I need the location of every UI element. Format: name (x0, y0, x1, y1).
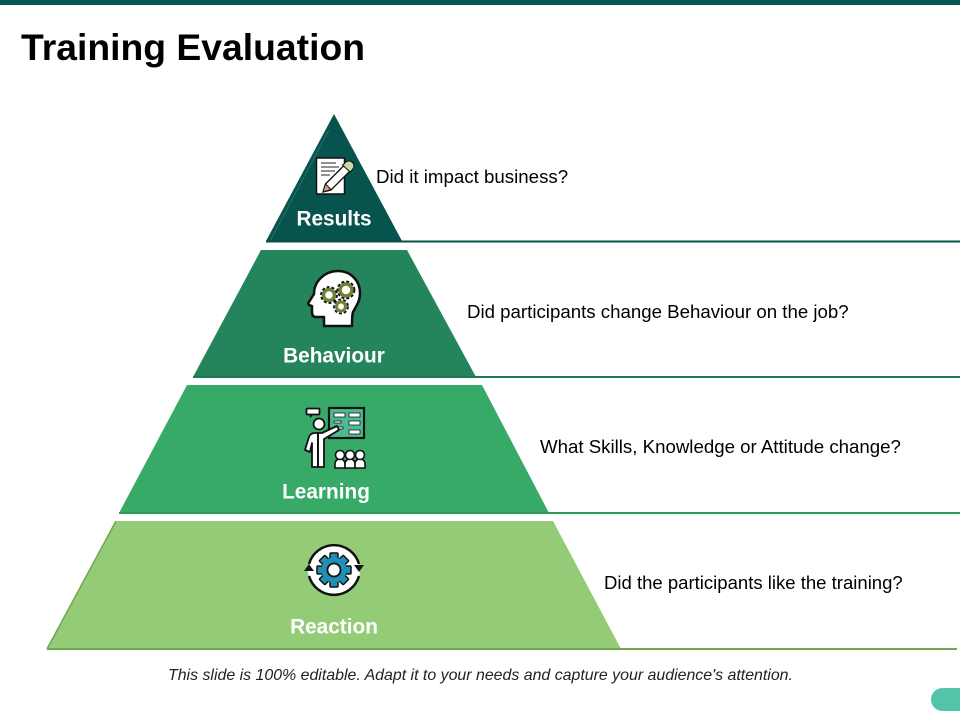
label: reaction: Reaction (290, 616, 378, 638)
text: results question: Did it impact business? (376, 166, 568, 187)
gear: bottom (334, 300, 348, 314)
title: Training Evaluation (21, 26, 365, 68)
label: behaviour: Behaviour (283, 344, 385, 368)
tier: learning (119, 385, 960, 513)
text: behaviour question: Did participants change Behaviour on the job? (467, 301, 849, 322)
gear: left (321, 287, 337, 303)
text: learning question: What Skills, Knowledge or Attitude change? (540, 436, 901, 457)
label: results: Results (296, 208, 372, 230)
label: learning: Learning (282, 480, 370, 504)
top bar (0, 0, 960, 5)
icon: head with gears (308, 271, 360, 326)
text: reaction question: Did the participants like the training? (604, 572, 903, 593)
page tab (931, 688, 960, 711)
icon: document and pen (316, 158, 354, 194)
icon: gear with cycle arrows (304, 544, 364, 596)
footer note: This slide is 100% editable. Adapt it to your needs and capture your audience's attention. (168, 667, 793, 684)
gear: top right (338, 282, 354, 298)
tier: behaviour (193, 250, 960, 377)
tier: results (266, 114, 960, 242)
icon: presenter at board with audience (305, 408, 365, 468)
tier: reaction (47, 521, 957, 649)
